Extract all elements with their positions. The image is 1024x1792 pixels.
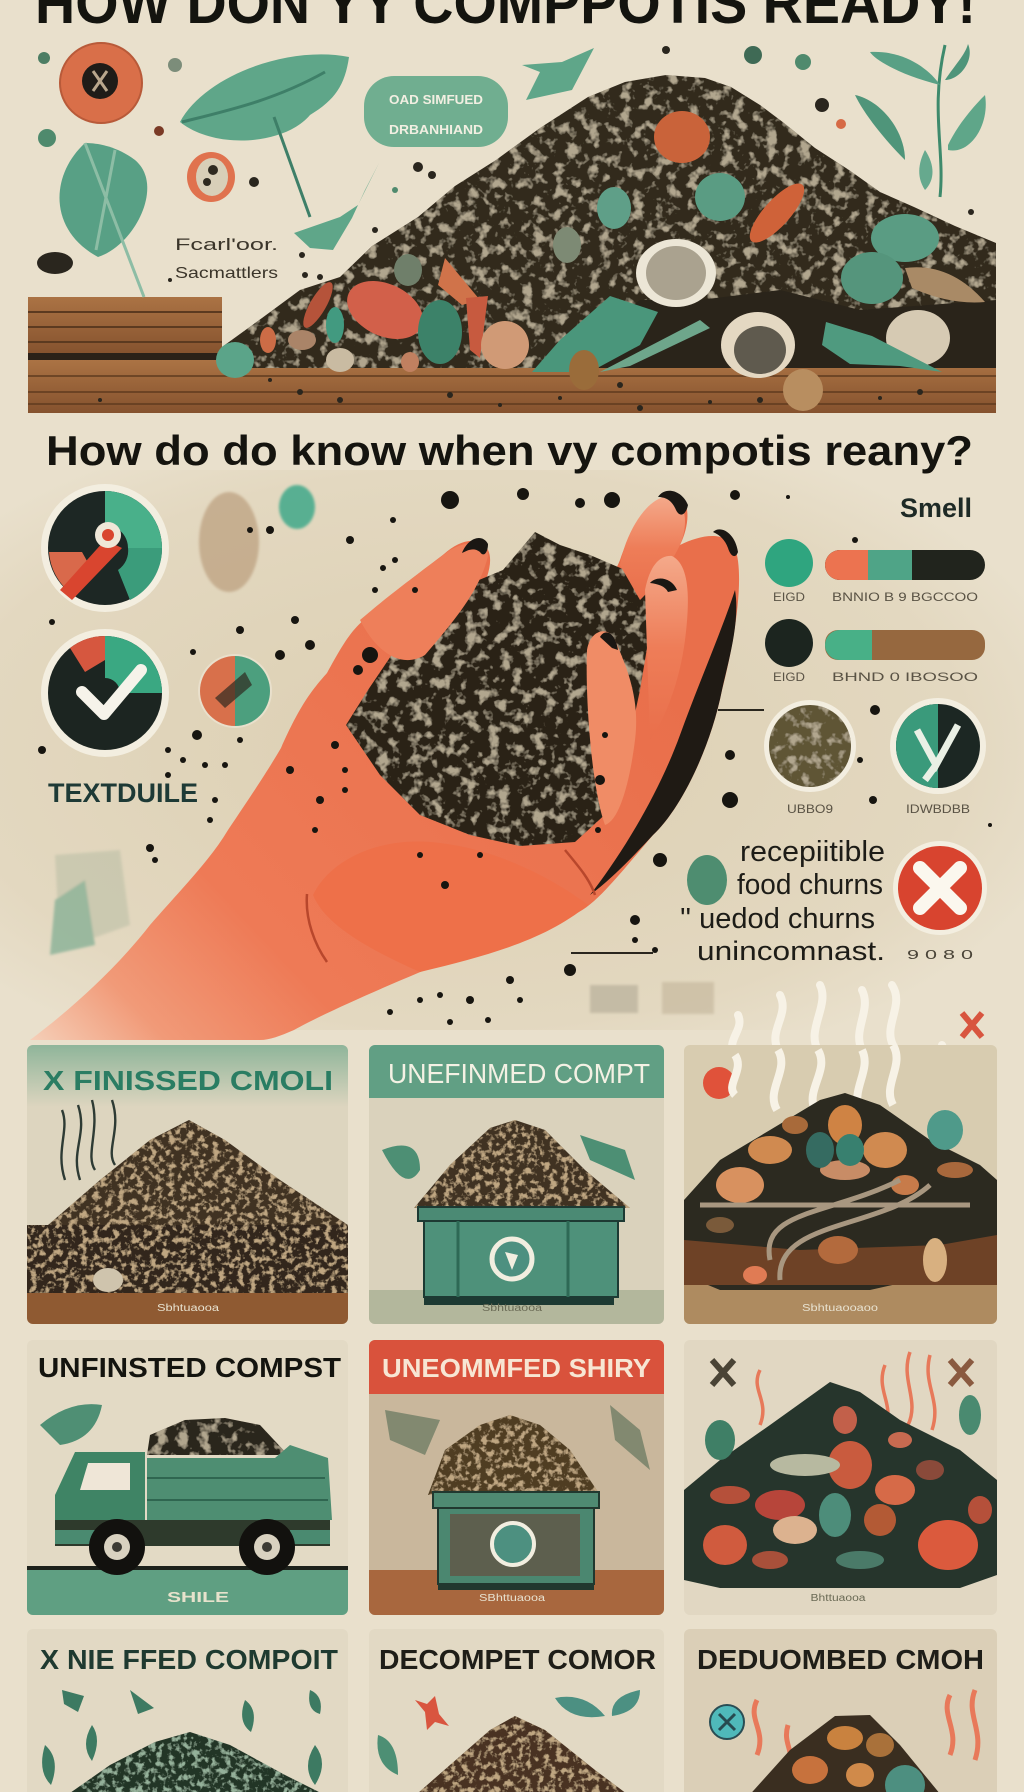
fingers [360, 497, 688, 825]
icon: top leaf [522, 48, 594, 100]
icon: left leaf [59, 143, 147, 297]
flying soil specks [38, 488, 992, 1025]
panel: rotten food heap [684, 1340, 997, 1615]
food heap [684, 1093, 997, 1290]
orange star [415, 1696, 449, 1730]
panel title: UNFINSTED COMPST [38, 1352, 341, 1383]
icon: split circle [198, 654, 272, 728]
legend row: smell scale one [765, 539, 985, 604]
icon: red cross top right [962, 1013, 982, 1037]
legend row: smell scale two: EIGD [773, 670, 805, 684]
truck [55, 1445, 332, 1575]
wooden board [28, 297, 228, 362]
palm crease [307, 850, 595, 962]
icon: green dark check circle [890, 698, 986, 816]
panel title: X NIE FFED COMPOIT [40, 1644, 338, 1675]
label: smell: Smell [900, 493, 972, 523]
icon: check gauge [41, 629, 169, 757]
panel: finished compost [27, 1045, 348, 1324]
text block: recognisable food chunks [680, 836, 885, 966]
palm highlight [313, 842, 588, 972]
icon: green blob [279, 485, 315, 529]
cross right [950, 1360, 972, 1385]
icon: green compost blob [687, 855, 727, 905]
food heap [684, 1382, 997, 1588]
panel: decomposed food heap [684, 1629, 997, 1792]
food heap [745, 1715, 945, 1792]
legend row: smell scale two [765, 619, 985, 684]
specks around pile [37, 46, 974, 411]
icon: small orange circle [187, 152, 235, 202]
steam lines [61, 1100, 115, 1180]
icon: red cross [893, 841, 987, 962]
icon: faded swirl [199, 492, 259, 592]
icon: soil sample circle [764, 700, 856, 816]
icon: green dark check circle: IDWBDBB [906, 802, 970, 816]
legend row: smell scale one: EIGD [773, 590, 805, 604]
pile [60, 1732, 335, 1792]
heat waves [754, 1690, 978, 1770]
panel title: DECOMPET COMOR [379, 1644, 656, 1675]
bin [433, 1492, 599, 1590]
leaf left [377, 1735, 398, 1775]
bin [418, 1207, 624, 1305]
legend row: smell scale one: BNNIO B 9 BGCCOO [832, 590, 978, 604]
callout: green pill: OAD SIMFUED [389, 92, 483, 107]
earth base [684, 1235, 997, 1285]
text block: small caption: Sacmattlers [175, 265, 278, 282]
panel: uncomposted food heap [684, 1045, 997, 1324]
icon: faded sketch [50, 850, 130, 955]
panel: decomposed compost [369, 1629, 664, 1792]
icon: teal cross badge [710, 1705, 744, 1739]
icon: green bag leaf [294, 163, 379, 250]
soil mound [222, 75, 996, 368]
panel captions: Bhttuaooa [810, 1593, 866, 1604]
crumbled compost [346, 532, 655, 846]
leaves [382, 1135, 635, 1180]
wooden table [28, 360, 996, 413]
icon: plant sprig [855, 44, 986, 197]
food items [703, 1395, 992, 1570]
panel title: UNEFINMED COMPT [388, 1058, 650, 1089]
panel captions: SBhttuaooa [479, 1593, 546, 1604]
icon: orange badge [60, 43, 142, 123]
fingernails [462, 491, 738, 650]
heat waves [757, 1352, 935, 1430]
icon: red cross: 9 0 8 0 [907, 947, 973, 962]
label: texture: TEXTDUILE [48, 778, 198, 808]
text block: small caption: Fcarl'oor. [175, 235, 278, 254]
leaves [42, 1690, 322, 1785]
roots [700, 1180, 970, 1280]
panel title: X FINISSED CMOLI [43, 1065, 333, 1096]
heat waves [732, 1045, 897, 1110]
panel captions [157, 1303, 879, 1604]
panel captions: Sbhtuaooa [157, 1303, 220, 1314]
icon: gauge [41, 484, 169, 612]
green leaf [40, 1404, 102, 1445]
panel: truck [27, 1340, 348, 1615]
text block: small caption [175, 235, 278, 282]
icon: large leaf [180, 54, 349, 217]
icon: soil sample circle: UBBO9 [787, 802, 833, 816]
connector line [571, 710, 764, 953]
heat waves above panel [732, 985, 945, 1110]
panel captions: Sbhtuaooaoo [802, 1303, 879, 1314]
text block: recognisable food chunks: '' uedod churns [680, 903, 875, 935]
wooden box [27, 1225, 348, 1293]
food items [706, 1105, 973, 1284]
teal leaf [555, 1690, 640, 1717]
panel title: DEDUOMBED CMOH [697, 1644, 984, 1675]
legend row: smell scale two: BHND 0 IBOSOO [832, 670, 978, 684]
panel: compost pile hero [28, 43, 996, 413]
text block: recognisable food chunks: recepiitible [740, 836, 885, 868]
crosses [712, 1360, 734, 1385]
faded smudges [590, 982, 714, 1014]
panel: hand with compost [30, 484, 992, 1040]
food items [792, 1726, 925, 1792]
food scraps in pile [216, 111, 996, 411]
red blob [703, 1067, 735, 1099]
panel: finished green compost [27, 1629, 348, 1792]
hand palm [30, 495, 739, 1040]
panel: red header bin [369, 1340, 664, 1615]
pile [410, 1716, 635, 1792]
callout: green pill: DRBANHIAND [389, 122, 483, 137]
panel captions: Sbhtuaooa [482, 1303, 543, 1314]
pile [414, 1120, 630, 1208]
callout: green pill [364, 76, 508, 147]
hand shadow edge [590, 590, 736, 895]
scraps [385, 1405, 650, 1470]
pile [428, 1415, 600, 1495]
soil on truck [147, 1418, 288, 1455]
heading: question: How do do know when vy compotis reany? [46, 427, 973, 474]
text block: recognisable food chunks: unincomnast. [697, 936, 885, 966]
panel title: UNEOMMFED SHIRY [382, 1353, 651, 1383]
text block: recognisable food chunks: food churns [737, 869, 883, 901]
shell [93, 1268, 123, 1292]
truck caption: SHILE [167, 1589, 229, 1606]
wood floor [27, 1293, 348, 1324]
panel: compost in green bin [369, 1045, 664, 1324]
pile [48, 1120, 348, 1230]
